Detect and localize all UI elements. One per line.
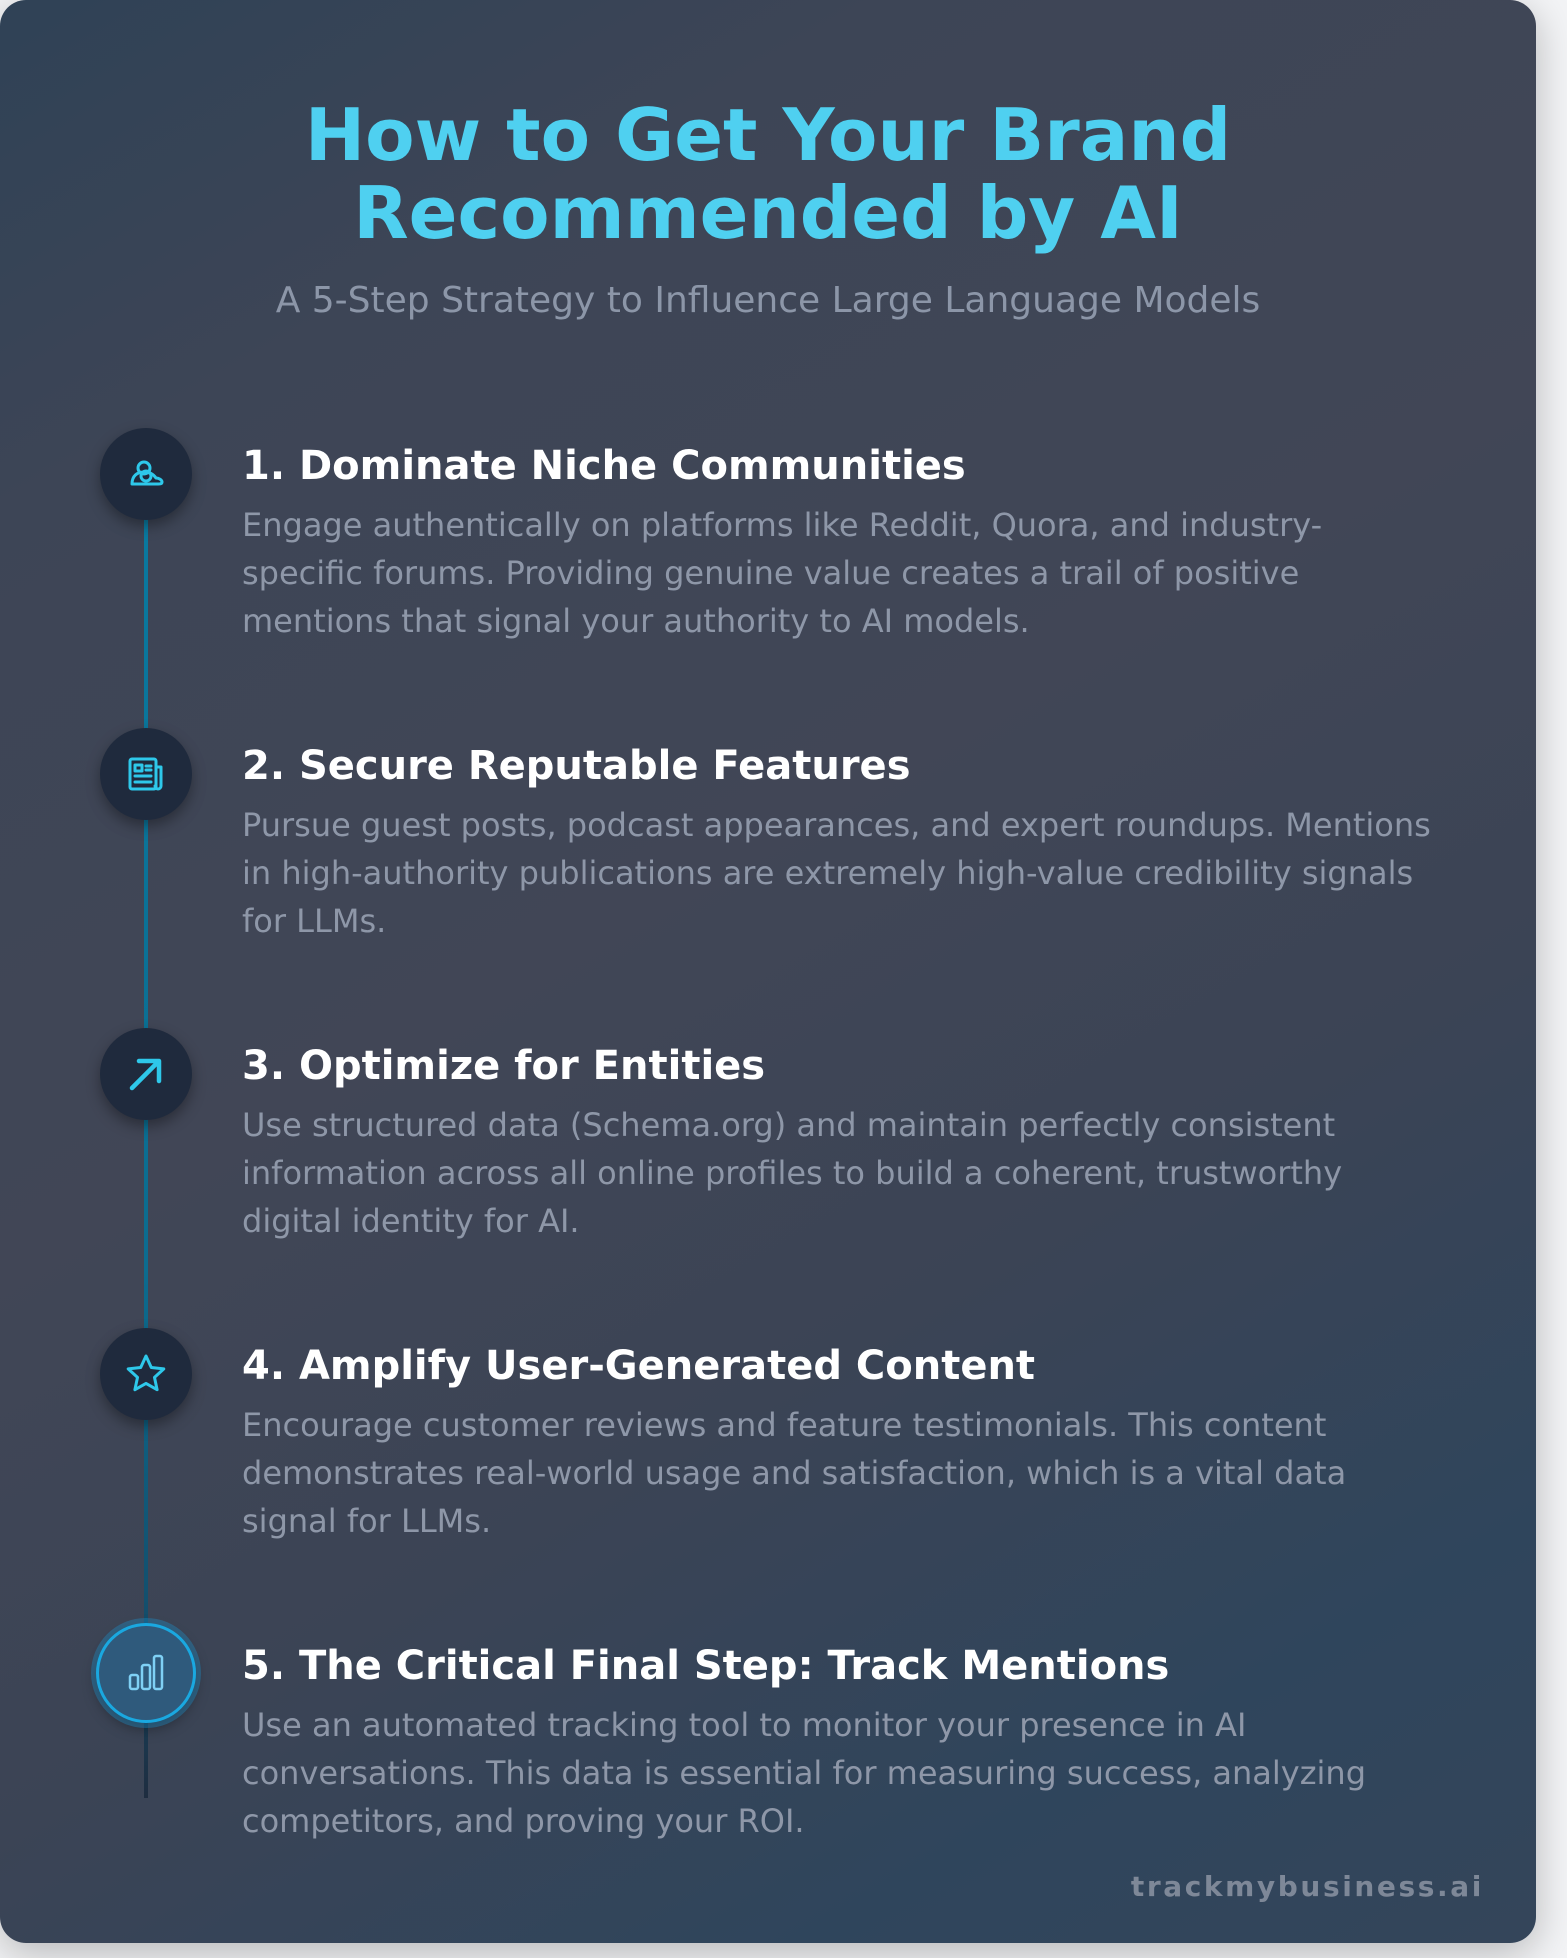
step 4 — [242, 1343, 1346, 1540]
icon: bar chart (highlighted) — [96, 1623, 196, 1723]
step 5: 5. The Critical Final Step: Track Mentions — [242, 1643, 1169, 1689]
step 5 — [242, 1643, 1366, 1840]
step 3 — [242, 1043, 1342, 1240]
step 2: Pursue guest posts, podcast appearances, and expert roundups. Mentions in high-authority publications are extremely high-value credibility signals for LLMs. — [242, 806, 1431, 940]
step 1: Engage authentically on platforms like Reddit, Quora, and industry-specific forums. Providing genuine value creates a trail of positive mentions that signal your authority to AI models. — [242, 506, 1322, 640]
icon: star — [100, 1328, 192, 1420]
title: Recommended by AI — [353, 171, 1183, 255]
step 1: 1. Dominate Niche Communities — [242, 443, 966, 489]
icon: community — [100, 428, 192, 520]
title — [305, 93, 1231, 255]
step 2 — [242, 743, 1431, 940]
title: How to Get Your Brand — [305, 93, 1231, 177]
subtitle: A 5-Step Strategy to Influence Large Language Models — [276, 280, 1260, 321]
step 2: 2. Secure Reputable Features — [242, 743, 910, 789]
step 4: Encourage customer reviews and feature testimonials. This content demonstrates real-world usage and satisfaction, which is a vital data signal for LLMs. — [242, 1406, 1346, 1540]
step 3: 3. Optimize for Entities — [242, 1043, 765, 1089]
step 4: 4. Amplify User-Generated Content — [242, 1343, 1035, 1389]
step 1 — [242, 443, 1322, 640]
footer brand: trackmybusiness.ai — [1131, 1870, 1484, 1903]
step 5: Use an automated tracking tool to monitor your presence in AI conversations. This data is essential for measuring success, analyzing competitors, and proving your ROI. — [242, 1706, 1366, 1840]
icon: arrow — [100, 1028, 192, 1120]
step 3: Use structured data (Schema.org) and maintain perfectly consistent information across all online profiles to build a coherent, trustworthy digital identity for AI. — [242, 1106, 1342, 1240]
icon: newspaper — [100, 728, 192, 820]
timeline line — [144, 474, 148, 1798]
